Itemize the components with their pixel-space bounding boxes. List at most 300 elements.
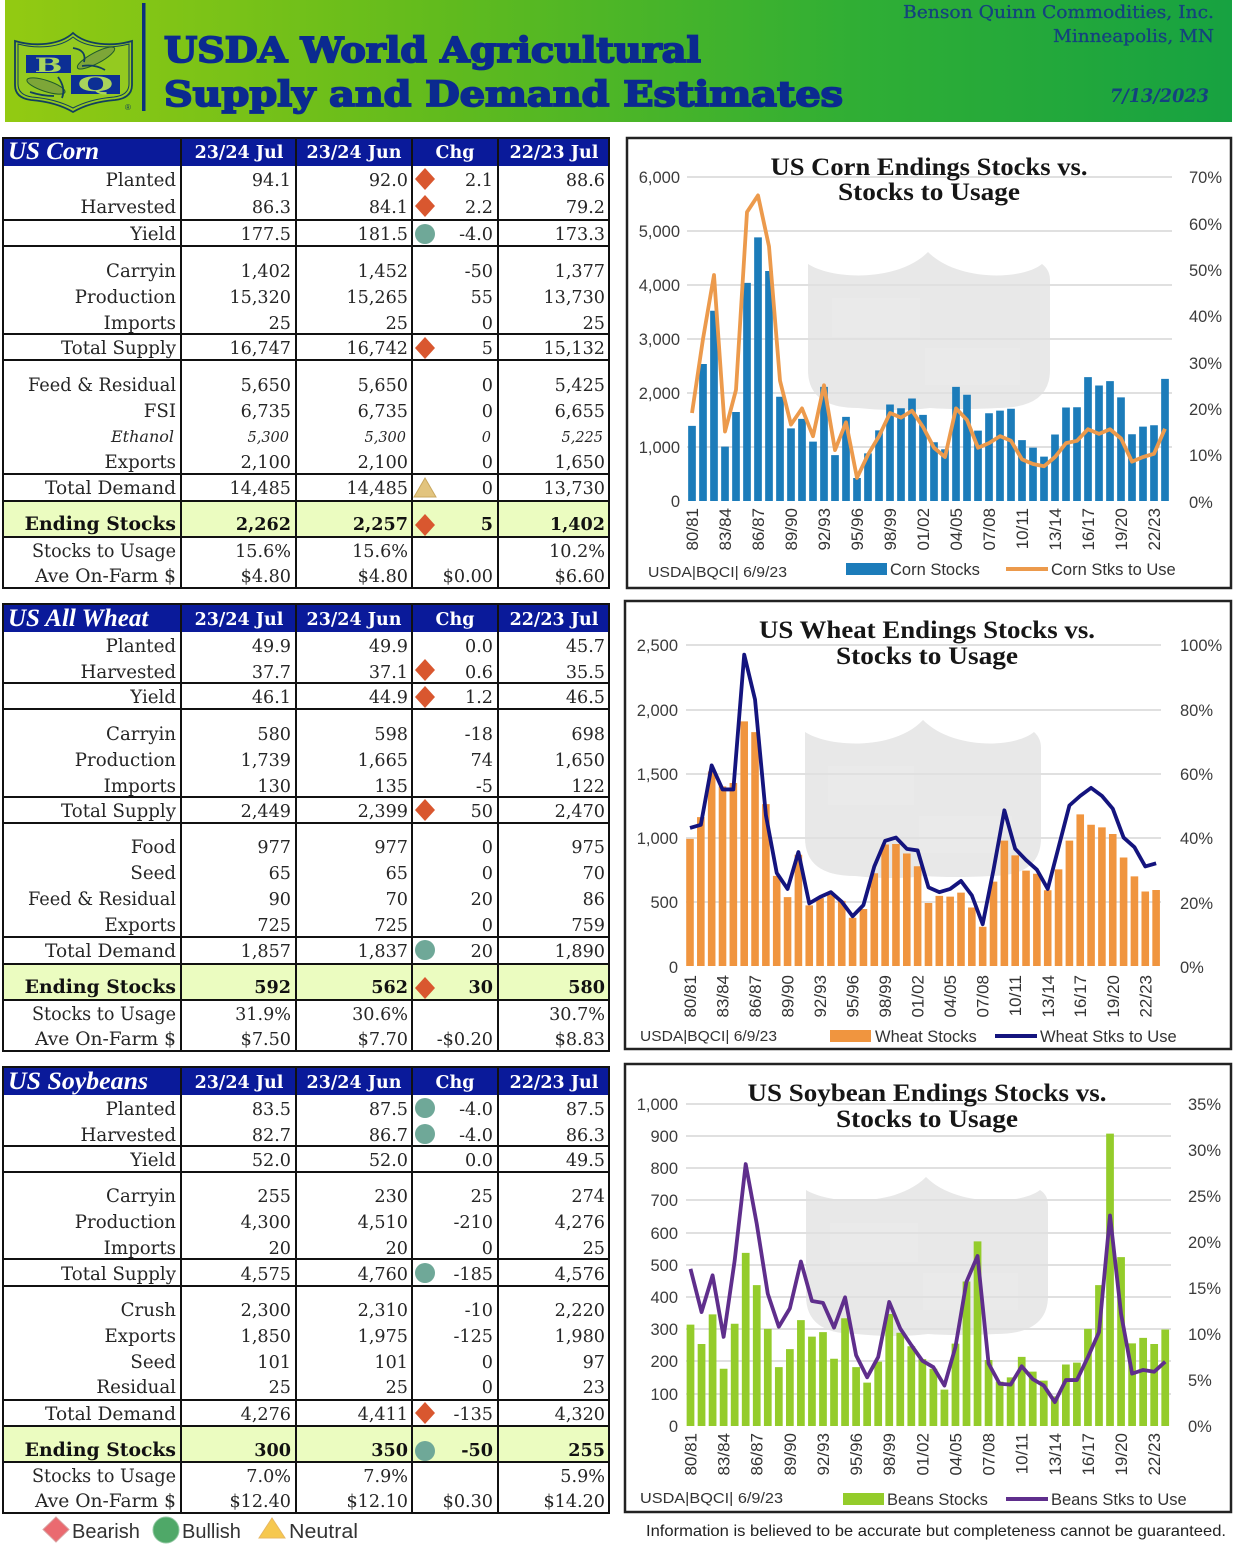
- x axis labels: 07/08: [980, 1433, 999, 1476]
- table header: US All Wheat: [3, 604, 609, 632]
- row: Harvested: 0.6: [465, 663, 493, 683]
- row: Harvested: 37.7: [252, 663, 291, 683]
- table header: US Corn: US Corn: [8, 138, 99, 165]
- row: Carryin: Carryin: [106, 1186, 176, 1207]
- row: Total Demand: 13,730: [543, 479, 605, 499]
- x axis labels: 13/14: [1046, 1433, 1065, 1476]
- row: Carryin: [106, 261, 605, 282]
- row: Harvested: 2.2: [465, 198, 493, 218]
- row: Production: [75, 287, 605, 308]
- left axis labels: 1,000: [639, 439, 680, 457]
- row: Feed and Residual: [28, 889, 605, 910]
- row: Ethanol: 5,300: [247, 430, 289, 446]
- row: Harvested: -4.0: [459, 1126, 493, 1146]
- icon: BQ shield logo: B: [34, 53, 62, 77]
- row: Ending Stocks: 350: [371, 1440, 408, 1461]
- row: Feed and Residual: Feed & Residual: [28, 375, 176, 396]
- row: Imports: [104, 313, 605, 334]
- watermark shield: [806, 1177, 1048, 1336]
- row: Feed and Residual: Feed & Residual: [28, 889, 176, 910]
- row: Residual: [96, 1377, 605, 1398]
- row: Planted: 49.9: [369, 637, 408, 657]
- row: Exports: [105, 1326, 605, 1347]
- row: Ave On-Farm price: $7.50: [241, 1030, 291, 1050]
- row: Harvested: 86.3: [566, 1126, 605, 1146]
- row: Production: [75, 1212, 605, 1233]
- row: Carryin: 255: [257, 1187, 291, 1207]
- left axis labels: 2,000: [639, 385, 680, 403]
- title: [164, 30, 843, 115]
- left axis labels: 5,000: [639, 223, 680, 241]
- x axis labels: 19/20: [1112, 1433, 1131, 1476]
- table header: US Corn: 23/24 Jul: [195, 143, 284, 163]
- x axis labels: 16/17: [1079, 1433, 1098, 1476]
- row: Residual: 25: [269, 1378, 291, 1398]
- right axis labels: 20%: [1180, 895, 1213, 913]
- row: Stocks to Usage: 30.7%: [549, 1005, 605, 1025]
- row: Ave On-Farm price: $4.80: [358, 567, 408, 587]
- row: FSI: 0: [482, 402, 493, 422]
- row: Feed and Residual: 90: [269, 890, 291, 910]
- row: Ending Stocks: Ending Stocks: [25, 513, 176, 535]
- row: Ethanol: [110, 427, 603, 446]
- row: Harvested: 86.7: [369, 1126, 408, 1146]
- x axis labels: 10/11: [1013, 508, 1032, 549]
- row: Feed and Residual: 70: [386, 890, 408, 910]
- row: Production: -210: [453, 1213, 493, 1233]
- row: Crush: [121, 1300, 605, 1321]
- row: Ave On-Farm price: $12.40: [229, 1492, 291, 1512]
- chart title: [759, 617, 1095, 670]
- right axis labels: [1180, 637, 1223, 977]
- x axis labels: 92/93: [815, 508, 834, 551]
- row: Crush: 2,310: [358, 1301, 408, 1321]
- right axis labels: 70%: [1189, 169, 1222, 187]
- row: Yield: 52.0: [369, 1151, 408, 1171]
- left axis labels: [639, 169, 680, 511]
- row: Exports: 2,100: [358, 453, 408, 473]
- row: Ethanol: 0: [482, 430, 491, 446]
- row: Carryin: 1,452: [358, 262, 408, 282]
- left axis labels: 700: [650, 1192, 678, 1210]
- row: Production: Production: [75, 287, 176, 308]
- row: Imports: Imports: [104, 313, 176, 334]
- row: Yield: 52.0: [252, 1151, 291, 1171]
- x axis labels: 80/81: [681, 975, 700, 1018]
- row: Yield: Yield: [129, 687, 176, 708]
- legend: bearish, bullish, neutral: [43, 1517, 358, 1543]
- row: Seed: 0: [482, 1353, 493, 1373]
- left axis labels: 0: [671, 493, 680, 511]
- signal markers: corn: [414, 168, 436, 536]
- row: Total Demand: 1,890: [555, 942, 605, 962]
- left axis labels: 6,000: [639, 169, 680, 187]
- x axis labels: 07/08: [974, 975, 993, 1018]
- row: Yield: 1.2: [465, 688, 493, 708]
- row: Ending Stocks: 30: [469, 977, 493, 998]
- x axis labels: 92/93: [811, 975, 830, 1018]
- row: Planted: 87.5: [566, 1100, 605, 1120]
- row: Production: 1,650: [555, 751, 605, 771]
- row: Exports: 1,975: [358, 1327, 408, 1347]
- row: Imports: Imports: [104, 1238, 176, 1259]
- x axis labels: 83/84: [716, 508, 735, 551]
- row: Total Supply: 4,760: [358, 1265, 408, 1285]
- right axis labels: 0%: [1180, 959, 1204, 977]
- row: Carryin: 1,402: [241, 262, 291, 282]
- row: Ave On-Farm price: [34, 1491, 605, 1512]
- chart legend and source: Wheat Stks to Use: [1040, 1028, 1177, 1046]
- row: Exports: Exports: [105, 1326, 176, 1347]
- row: Imports: [104, 1238, 605, 1259]
- row: Planted: 0.0: [465, 637, 493, 657]
- chart legend and source: Corn Stocks: [890, 561, 980, 579]
- row: Production: Production: [75, 750, 176, 771]
- row: Production: 4,276: [555, 1213, 605, 1233]
- row: Planted: 83.5: [252, 1100, 291, 1120]
- row: Residual: Residual: [96, 1377, 176, 1398]
- row: Stocks to Usage: Stocks to Usage: [32, 1466, 176, 1487]
- row: Food: [131, 837, 605, 858]
- left axis labels: 200: [650, 1353, 678, 1371]
- left axis labels: 300: [650, 1321, 678, 1339]
- row: Total Demand: 1,857: [241, 942, 291, 962]
- row: Harvested: 82.7: [252, 1126, 291, 1146]
- row: Ave On-Farm price: [34, 566, 605, 587]
- row: Harvested: [81, 662, 605, 683]
- x axis labels: 01/02: [914, 508, 933, 551]
- row: Harvested: 84.1: [369, 198, 408, 218]
- row: Seed: 0: [482, 864, 493, 884]
- row: Total Supply: 2,449: [241, 802, 291, 822]
- row: Ave On-Farm price: $12.10: [346, 1492, 408, 1512]
- x axis labels: 86/87: [748, 1433, 767, 1476]
- row: Carryin: 230: [374, 1187, 408, 1207]
- row: Stocks to Usage: 7.9%: [363, 1467, 408, 1487]
- row: Imports: 135: [374, 777, 408, 797]
- row: Total Supply: 16,747: [229, 339, 291, 359]
- row: Exports: 1,980: [555, 1327, 605, 1347]
- row: Exports: 759: [571, 916, 605, 936]
- x axis labels: 86/87: [749, 508, 768, 551]
- row: Ave On-Farm price: Ave On-Farm $: [34, 1029, 176, 1050]
- row: Total Demand: 14,485: [229, 479, 291, 499]
- row: Production: [75, 750, 605, 771]
- row: Total Demand: 0: [482, 479, 493, 499]
- row: FSI: FSI: [144, 401, 176, 422]
- row: Production: 55: [471, 288, 493, 308]
- row: Carryin: Carryin: [106, 724, 176, 745]
- row: Exports: -125: [453, 1327, 493, 1347]
- row: Ave On-Farm price: $0.30: [443, 1492, 493, 1512]
- signal markers: soybeans: [415, 1098, 435, 1461]
- row: Exports: 1,850: [241, 1327, 291, 1347]
- chart legend and source: [640, 1491, 1187, 1509]
- row: Planted: Planted: [106, 636, 176, 657]
- right axis labels: 10%: [1188, 1326, 1221, 1344]
- right axis labels: 35%: [1188, 1096, 1221, 1114]
- x axis labels: 95/96: [848, 508, 867, 551]
- row: Seed: Seed: [130, 1352, 176, 1373]
- row: Stocks to Usage: [32, 1004, 605, 1025]
- row: Feed and Residual: [28, 375, 605, 396]
- x axis labels: 01/02: [913, 1433, 932, 1476]
- chart legend and source: USDA|BQCI| 6/9/23: [648, 565, 787, 581]
- x axis labels: 16/17: [1079, 508, 1098, 551]
- row: Planted: Planted: [106, 1099, 176, 1120]
- row: Food: 977: [257, 838, 291, 858]
- left axis labels: 2,500: [637, 637, 678, 655]
- company name and location: Benson Quinn Commodities, Inc.: [903, 2, 1214, 23]
- panel: US Soybeans table: [3, 1067, 609, 1513]
- x axis labels: [682, 1433, 1164, 1476]
- right axis labels: 20%: [1189, 401, 1222, 419]
- watermark shield: [805, 720, 1041, 878]
- row: Yield: [129, 1150, 605, 1171]
- right axis labels: 40%: [1180, 830, 1213, 848]
- row: Stocks to Usage: 30.6%: [352, 1005, 408, 1025]
- right axis labels: 30%: [1189, 355, 1222, 373]
- x axis labels: 89/90: [782, 508, 801, 551]
- left axis labels: 100: [650, 1386, 678, 1404]
- x axis labels: 19/20: [1104, 975, 1123, 1018]
- row: Ending Stocks: 2,257: [353, 514, 408, 535]
- row: Stocks to Usage: 5.9%: [560, 1467, 605, 1487]
- chart legend and source: Wheat Stocks: [875, 1028, 977, 1046]
- left axis labels: 3,000: [639, 331, 680, 349]
- row: FSI: 6,735: [241, 402, 291, 422]
- row: Total Supply: 50: [471, 802, 493, 822]
- row: Imports: 0: [482, 1239, 493, 1259]
- row: Ending Stocks: [25, 1439, 605, 1461]
- row: Total Demand: Total Demand: [45, 478, 176, 499]
- row: Carryin: 698: [571, 725, 605, 745]
- row: Ending Stocks: 580: [568, 977, 605, 998]
- row: Production: 4,300: [241, 1213, 291, 1233]
- right axis labels: 10%: [1189, 447, 1222, 465]
- row: Carryin: -18: [465, 725, 493, 745]
- row: Ave On-Farm price: Ave On-Farm $: [34, 566, 176, 587]
- row: Carryin: Carryin: [106, 261, 176, 282]
- row: Exports: 725: [374, 916, 408, 936]
- row: Exports: 0: [482, 453, 493, 473]
- row: Exports: Exports: [105, 915, 176, 936]
- row: Total Demand: [45, 941, 605, 962]
- row: Ave On-Farm price: $6.60: [555, 567, 605, 587]
- table header: US All Wheat: 23/24 Jul: [195, 610, 284, 630]
- right axis labels: [1189, 169, 1222, 512]
- table header: US Soybeans: US Soybeans: [8, 1068, 148, 1095]
- row: Planted: 87.5: [369, 1100, 408, 1120]
- x axis labels: 89/90: [781, 1433, 800, 1476]
- x axis labels: 98/99: [880, 1433, 899, 1476]
- chart title: US Soybean Endings Stocks vs.: [748, 1080, 1106, 1107]
- row: Imports: 20: [269, 1239, 291, 1259]
- row: Seed: [130, 1352, 605, 1373]
- row: Stocks to Usage: [32, 541, 605, 562]
- row: Carryin: [106, 1186, 605, 1207]
- row: Production: 13,730: [543, 288, 605, 308]
- company name and location: Minneapolis, MN: [1053, 26, 1214, 47]
- row: Carryin: 25: [471, 1187, 493, 1207]
- row: Harvested: Harvested: [81, 662, 176, 683]
- row: Ave On-Farm price: $8.83: [555, 1030, 605, 1050]
- row: Total Supply: 15,132: [543, 339, 605, 359]
- x axis labels: 98/99: [876, 975, 895, 1018]
- row: Stocks to Usage: 15.6%: [352, 542, 408, 562]
- x axis labels: 22/23: [1145, 1433, 1164, 1476]
- right axis labels: 25%: [1188, 1188, 1221, 1206]
- x axis labels: 19/20: [1112, 508, 1131, 551]
- row: Seed: Seed: [130, 863, 176, 884]
- row: Yield: -4.0: [459, 225, 493, 245]
- row: Total Supply: 4,575: [241, 1265, 291, 1285]
- right axis labels: 15%: [1188, 1280, 1221, 1298]
- row: Total Demand: 1,837: [358, 942, 408, 962]
- row: Yield: 0.0: [465, 1151, 493, 1171]
- x axis labels: 83/84: [714, 975, 732, 1018]
- line: corn stocks to use: [692, 195, 1165, 478]
- right axis labels: 30%: [1188, 1142, 1221, 1160]
- table header: US All Wheat: Chg: [436, 610, 474, 630]
- row: Ave On-Farm price: $0.00: [443, 567, 493, 587]
- row: Seed: 101: [374, 1353, 408, 1373]
- x axis labels: 92/93: [814, 1433, 833, 1476]
- signal markers: wheat: [415, 659, 435, 999]
- row: Ethanol: 5,300: [364, 430, 406, 446]
- left axis labels: [637, 637, 678, 977]
- row: Imports: 130: [257, 777, 291, 797]
- row: Yield: [129, 224, 605, 245]
- row: Carryin: -50: [465, 262, 493, 282]
- chart title: Stocks to Usage: [838, 179, 1020, 206]
- chart title: US Wheat Endings Stocks vs.: [759, 617, 1095, 644]
- row: Ave On-Farm price: [34, 1029, 605, 1050]
- row: Total Demand: Total Demand: [45, 941, 176, 962]
- row: Imports: 25: [583, 314, 605, 334]
- left axis labels: 0: [669, 1418, 678, 1436]
- row: Total Supply: [61, 1264, 605, 1285]
- left axis labels: 1,000: [637, 830, 678, 848]
- table header: US Corn: 23/24 Jun: [307, 143, 402, 163]
- row: Seed: 101: [257, 1353, 291, 1373]
- row: Planted: 45.7: [566, 637, 605, 657]
- table header: US Soybeans: 23/24 Jun: [307, 1073, 402, 1093]
- row: Ending Stocks: [25, 513, 605, 535]
- chart legend and source: USDA|BQCI| 6/9/23: [640, 1029, 777, 1045]
- row: Ave On-Farm price: -$0.20: [437, 1030, 493, 1050]
- row: Planted: [106, 636, 605, 657]
- bars: bean stocks: [687, 1134, 1169, 1426]
- row: Total Supply: 4,576: [555, 1265, 605, 1285]
- right axis labels: [1188, 1096, 1221, 1436]
- right axis labels: 80%: [1180, 702, 1213, 720]
- icon: BQ shield logo: Q: [78, 72, 114, 96]
- row: Exports: [105, 915, 605, 936]
- row: Ending Stocks: -50: [461, 1440, 493, 1461]
- table header: US Soybeans: 23/24 Jul: [195, 1073, 284, 1093]
- row: Food: Food: [131, 837, 176, 858]
- row: Production: 1,665: [358, 751, 408, 771]
- right axis labels: 60%: [1189, 216, 1222, 234]
- row: Seed: 65: [269, 864, 291, 884]
- row: Planted: 49.9: [252, 637, 291, 657]
- right axis labels: 0%: [1188, 1418, 1212, 1436]
- x axis labels: 16/17: [1071, 975, 1090, 1018]
- row: Total Demand: 14,485: [346, 479, 408, 499]
- x axis labels: 13/14: [1046, 508, 1065, 551]
- row: Crush: 2,220: [555, 1301, 605, 1321]
- row: Planted: 2.1: [465, 171, 493, 191]
- row: Harvested: Harvested: [81, 197, 176, 218]
- row: Crush: Crush: [121, 1300, 176, 1321]
- x axis labels: 95/96: [847, 1433, 866, 1476]
- title: USDA World Agricultural: [164, 30, 701, 71]
- x axis labels: 98/99: [881, 508, 900, 551]
- row: Production: 74: [471, 751, 493, 771]
- x axis labels: 86/87: [746, 975, 765, 1018]
- row: Imports: [104, 776, 605, 797]
- row: Carryin: 1,377: [555, 262, 605, 282]
- row: Imports: Imports: [104, 776, 176, 797]
- row: Yield: 181.5: [358, 225, 408, 245]
- row: Feed and Residual: 5,425: [555, 376, 605, 396]
- row: Total Supply: 2,470: [555, 802, 605, 822]
- row: Ending Stocks: 300: [254, 1440, 291, 1461]
- table header: US Soybeans: 22/23 Jul: [510, 1073, 599, 1093]
- row: Carryin: [106, 724, 605, 745]
- row: Exports: [105, 452, 605, 473]
- row: Exports: 0: [482, 916, 493, 936]
- row: Ending Stocks: 2,262: [236, 514, 291, 535]
- panel: US All Wheat table: [3, 604, 609, 1051]
- left axis labels: 1,000: [637, 1096, 678, 1114]
- row: Planted: 94.1: [252, 171, 291, 191]
- row: Total Supply: [61, 338, 605, 359]
- row: Imports: 25: [386, 314, 408, 334]
- legend: bearish, bullish, neutral: Bearish: [72, 1521, 140, 1543]
- right axis labels: 60%: [1180, 766, 1213, 784]
- row: Harvested: 35.5: [566, 663, 605, 683]
- row: Ending Stocks: 592: [254, 977, 291, 998]
- line: beans stocks to use: [690, 1164, 1165, 1402]
- chart title: [748, 1080, 1106, 1133]
- left axis labels: 500: [650, 894, 678, 912]
- row: Seed: [130, 863, 605, 884]
- row: Planted: Planted: [106, 170, 176, 191]
- table header: US Corn: 22/23 Jul: [510, 143, 599, 163]
- row: Ending Stocks: Ending Stocks: [25, 976, 176, 998]
- table header: US All Wheat: US All Wheat: [8, 605, 149, 632]
- row: Total Supply: [61, 801, 605, 822]
- x axis labels: 10/11: [1013, 1433, 1032, 1474]
- row: Stocks to Usage: [32, 1466, 605, 1487]
- disclaimer: Information is believed to be accurate but completeness cannot be guaranteed.: [646, 1523, 1226, 1540]
- legend: bearish, bullish, neutral: Bullish: [182, 1521, 241, 1543]
- chart legend and source: [640, 1028, 1177, 1046]
- row: Total Demand: Total Demand: [45, 1404, 176, 1425]
- row: Ending Stocks: [25, 976, 605, 998]
- row: Yield: 49.5: [566, 1151, 605, 1171]
- row: Exports: 1,650: [555, 453, 605, 473]
- left axis labels: [637, 1096, 678, 1436]
- row: Carryin: 274: [571, 1187, 605, 1207]
- x axis labels: 13/14: [1039, 975, 1058, 1018]
- left axis labels: 500: [650, 1257, 678, 1275]
- row: Ave On-Farm price: $14.20: [543, 1492, 605, 1512]
- row: Ending Stocks: 5: [481, 514, 493, 535]
- right axis labels: 20%: [1188, 1234, 1221, 1252]
